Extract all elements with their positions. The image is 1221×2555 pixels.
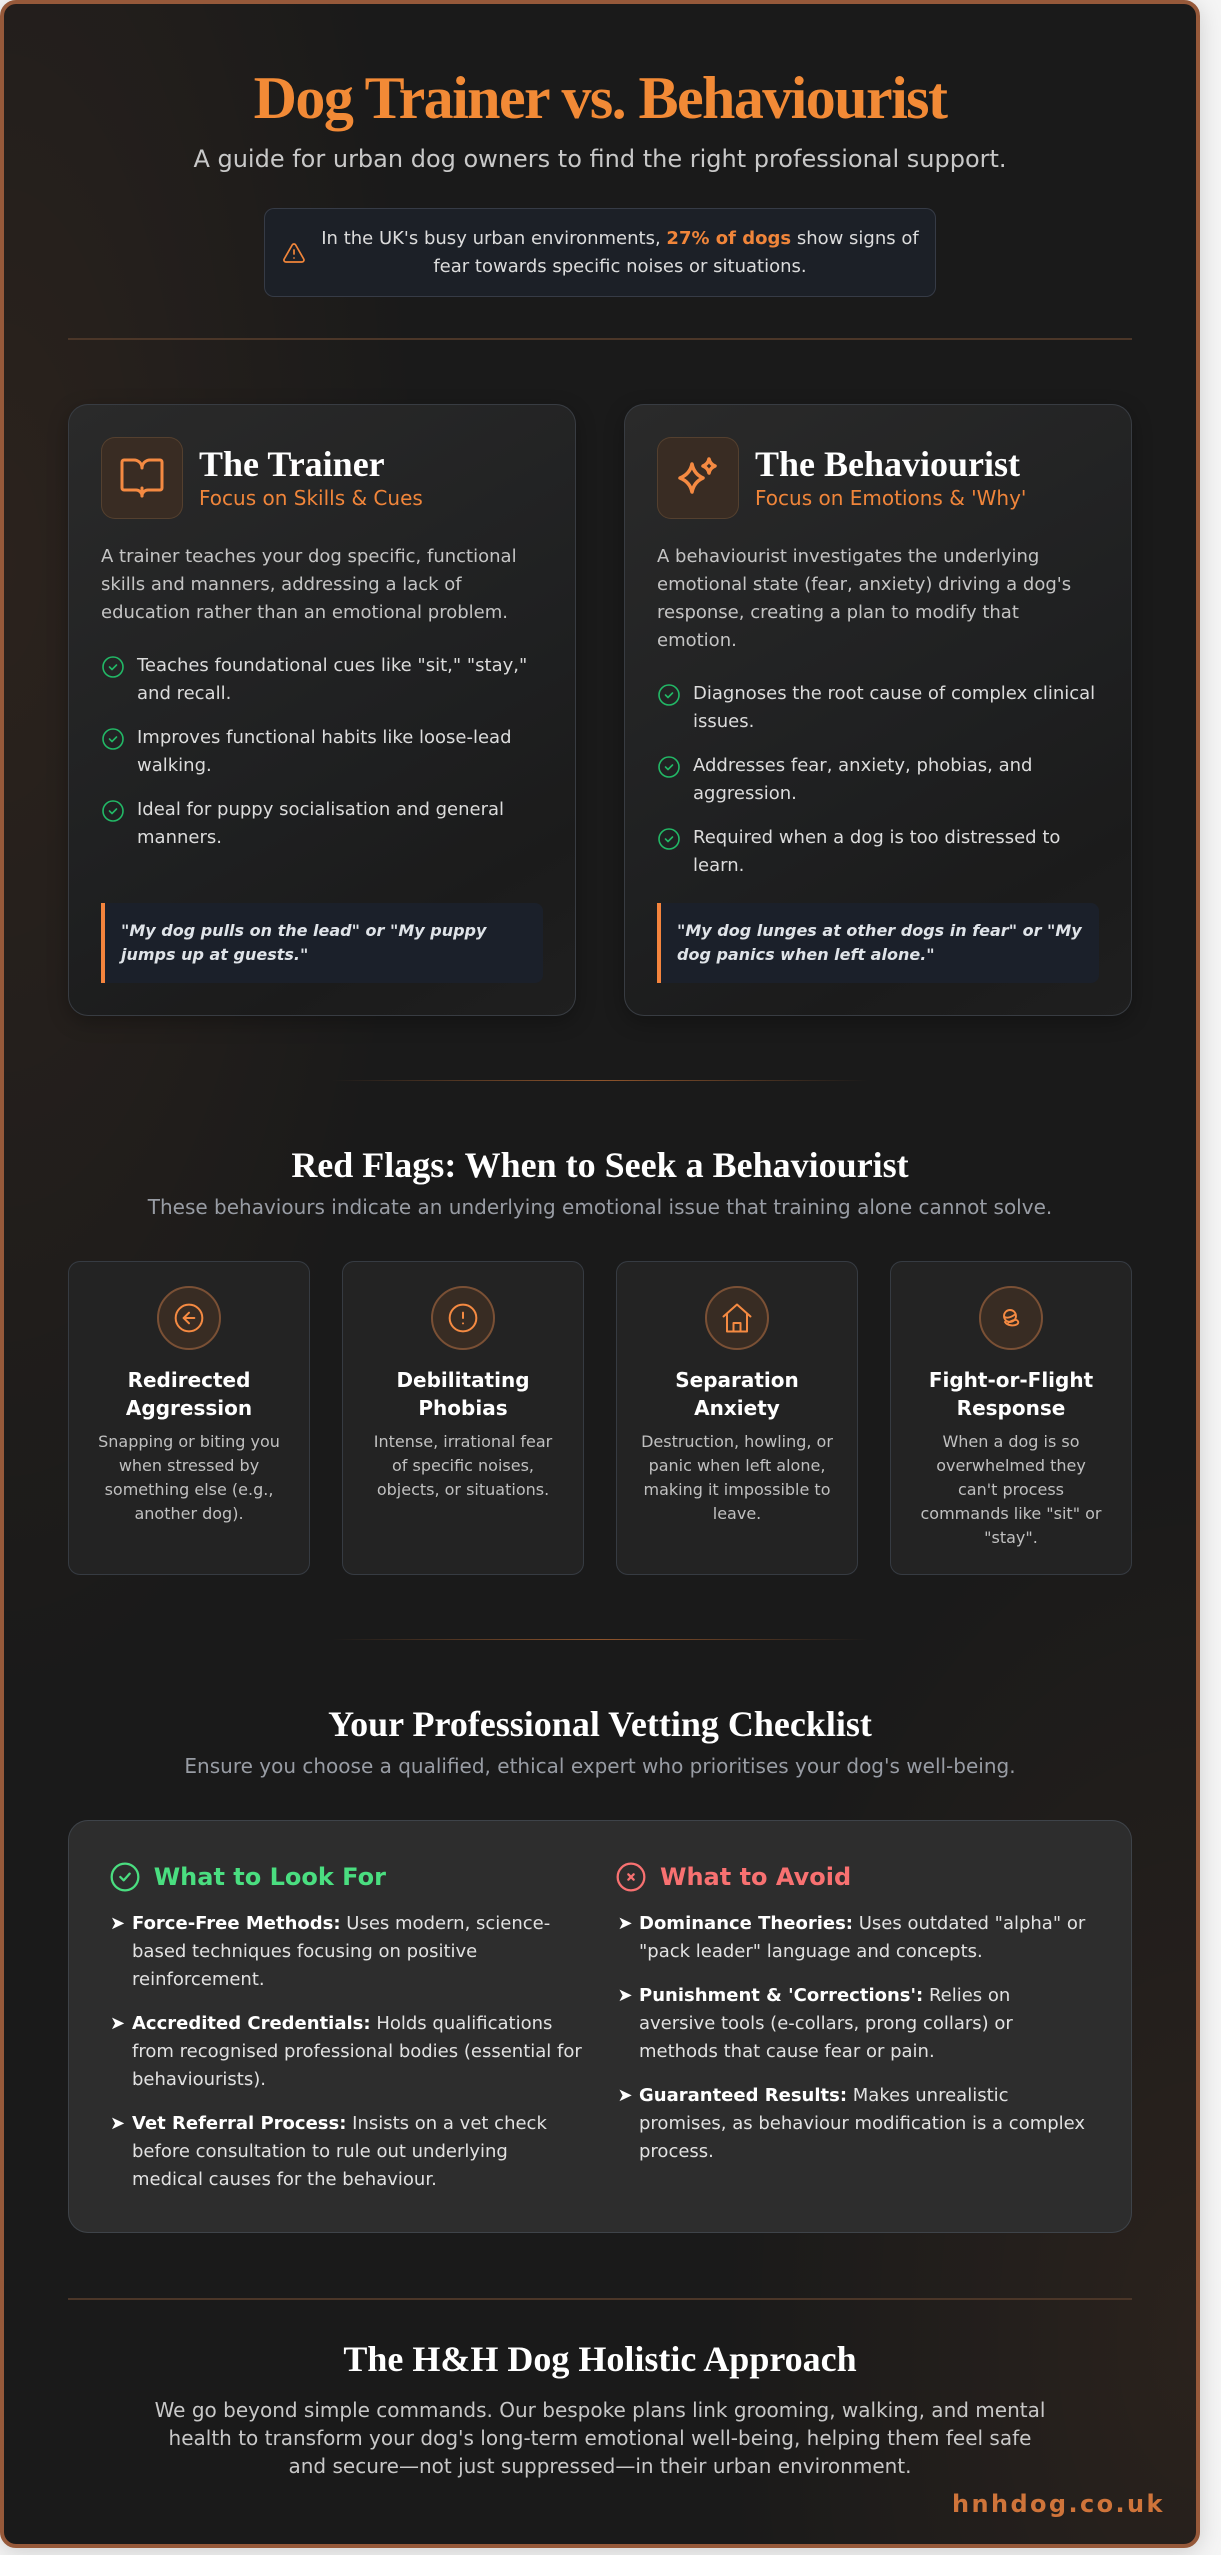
panel: checklist (68, 1820, 1132, 2233)
bullet marker: ➤ (110, 2013, 125, 2034)
flag description: of specific noises, (392, 1456, 534, 1474)
callout text: fear towards specific noises or situations. (433, 256, 807, 277)
description (101, 546, 517, 623)
red flags subtitle: These behaviours indicate an underlying emotional issue that training alone cannot solve. (148, 1195, 1052, 1219)
list item: Addresses fear, anxiety, phobias, and (693, 755, 1032, 776)
subtitle: A guide for urban dog owners to find the right professional support. (193, 144, 1007, 172)
flag title: Fight-or-Flight (929, 1368, 1093, 1392)
quote: dog panics when left alone." (677, 945, 935, 964)
icon: green check (110, 1862, 140, 1892)
quote (657, 903, 1099, 983)
flag description: Destruction, howling, or (641, 1432, 833, 1450)
flag title: Anxiety (694, 1396, 780, 1420)
list item: Ideal for puppy socialisation and general (137, 799, 504, 820)
description: skills and manners, addressing a lack of (101, 574, 462, 595)
list item: Diagnoses the root cause of complex clinical (693, 683, 1095, 704)
flag title: Redirected (128, 1368, 250, 1392)
list item (658, 755, 1032, 804)
avoid item: Dominance Theories: Uses outdated "alpha" or (639, 1913, 1085, 1934)
flag description: When a dog is so (942, 1432, 1080, 1450)
flag title (929, 1368, 1093, 1420)
look-for item: Force-Free Methods: Uses modern, science- (132, 1913, 550, 1934)
flag description: can't process (958, 1480, 1064, 1498)
panel: the trainer (68, 404, 576, 1016)
flag description: Intense, irrational fear (374, 1432, 552, 1450)
look-for item: Accredited Credentials: Holds qualifications (132, 2013, 552, 2034)
description: education rather than an emotional problem. (101, 602, 508, 623)
flag description: commands like "sit" or (920, 1504, 1102, 1522)
list item: manners. (137, 827, 222, 848)
list item: Required when a dog is too distressed to (693, 827, 1060, 848)
callout text (321, 228, 920, 277)
heading: what to avoid: What to Avoid (660, 1863, 851, 1891)
icon: open book (101, 437, 183, 519)
quote: "My dog pulls on the lead" or "My puppy (121, 921, 486, 940)
heading: the trainer: The Trainer (199, 444, 385, 484)
look-for item: based techniques focusing on positive (132, 1941, 477, 1962)
look-for item: from recognised professional bodies (essential for (132, 2041, 582, 2062)
flag description (98, 1432, 280, 1522)
panel: debilitating phobias (342, 1261, 584, 1575)
quote: jumps up at guests." (121, 945, 308, 964)
icon: scribble (979, 1286, 1043, 1350)
flag description: overwhelmed they (936, 1456, 1086, 1474)
flag title (126, 1368, 252, 1420)
avoid item (639, 2085, 1085, 2162)
panel: fight-or-flight response (890, 1261, 1132, 1575)
icon: sparkles (657, 437, 739, 519)
look-for item (132, 2113, 547, 2190)
list item: Improves functional habits like loose-lead (137, 727, 512, 748)
flag title (396, 1368, 530, 1420)
look-for item (132, 1913, 550, 1990)
panel: separation anxiety (616, 1261, 858, 1575)
avoid item: methods that cause fear or pain. (639, 2041, 935, 2062)
icon: warning triangle (283, 243, 305, 263)
list item (102, 727, 512, 776)
description: A trainer teaches your dog specific, functional (101, 546, 517, 567)
panel: the behaviourist (624, 404, 1132, 1016)
flag title: Debilitating (396, 1368, 530, 1392)
callout: statistic (264, 208, 936, 297)
heading: the behaviourist: The Behaviourist (755, 444, 1020, 484)
list item: and recall. (137, 683, 231, 704)
heading: holistic approach: The H&H Dog Holistic Approach (343, 2339, 857, 2379)
closing paragraph (155, 2398, 1045, 2478)
closing paragraph: and secure—not just suppressed—in their urban environment. (288, 2454, 912, 2478)
look-for item (132, 2013, 582, 2090)
list item (658, 683, 1095, 732)
flag description: another dog). (134, 1504, 244, 1522)
look-for item: behaviourists). (132, 2069, 266, 2090)
title: Dog Trainer vs. Behaviourist (254, 65, 946, 131)
flag description: "stay". (984, 1528, 1038, 1546)
closing paragraph: health to transform your dog's long-term emotional well-being, helping them feel safe (169, 2426, 1031, 2450)
avoid item: promises, as behaviour modification is a complex (639, 2113, 1085, 2134)
avoid item: Punishment & 'Corrections': Relies on (639, 1985, 1010, 2006)
avoid item: "pack leader" language and concepts. (639, 1941, 983, 1962)
avoid item: aversive tools (e-collars, prong collars) or (639, 2013, 1013, 2034)
list item: learn. (693, 855, 744, 876)
flag description: objects, or situations. (377, 1480, 549, 1498)
website footer: hnhdog.co.uk (952, 2490, 1165, 2518)
flag title: Separation (675, 1368, 799, 1392)
panel: redirected aggression (68, 1261, 310, 1575)
tagline: Focus on Emotions & 'Why' (755, 486, 1026, 510)
flag description (374, 1432, 552, 1498)
description: A behaviourist investigates the underlying (657, 546, 1039, 567)
flag title (675, 1368, 799, 1420)
heading: what to look for: What to Look For (154, 1863, 386, 1891)
flag description (641, 1432, 833, 1522)
description (657, 546, 1071, 651)
closing paragraph: We go beyond simple commands. Our bespoke plans link grooming, walking, and mental (155, 2398, 1045, 2422)
icon: house (705, 1286, 769, 1350)
avoid item: process. (639, 2141, 714, 2162)
flag description: panic when left alone, (649, 1456, 825, 1474)
flag description: something else (e.g., (105, 1480, 273, 1498)
look-for item: reinforcement. (132, 1969, 265, 1990)
checklist subtitle: Ensure you choose a qualified, ethical expert who prioritises your dog's well-being. (184, 1754, 1016, 1778)
description: emotional state (fear, anxiety) driving a dog's (657, 574, 1071, 595)
heading: red flags: Red Flags: When to Seek a Behaviourist (291, 1144, 909, 1184)
list item (102, 799, 504, 848)
flag description: Snapping or biting you (98, 1432, 280, 1450)
flag title: Aggression (126, 1396, 252, 1420)
flag description (920, 1432, 1102, 1546)
description: response, creating a plan to modify that (657, 602, 1019, 623)
look-for item: Vet Referral Process: Insists on a vet check (132, 2113, 547, 2134)
list item: aggression. (693, 783, 797, 804)
bullet marker: ➤ (110, 2113, 125, 2134)
list item: issues. (693, 711, 754, 732)
flag description: leave. (713, 1504, 761, 1522)
description: emotion. (657, 630, 737, 651)
icon: arrow in circle (157, 1286, 221, 1350)
flag description: when stressed by (119, 1456, 259, 1474)
avoid item (639, 1985, 1013, 2062)
tagline: Focus on Skills & Cues (199, 486, 423, 510)
flag title: Phobias (418, 1396, 508, 1420)
list item: Teaches foundational cues like "sit," "stay," (137, 655, 527, 676)
flag description: making it impossible to (644, 1480, 830, 1498)
look-for item: medical causes for the behaviour. (132, 2169, 437, 2190)
bullet marker: ➤ (110, 1913, 125, 1934)
avoid item (639, 1913, 1086, 1962)
quote: "My dog lunges at other dogs in fear" or "My (677, 921, 1082, 940)
bullet marker: ➤ (618, 1913, 633, 1934)
list item (102, 655, 527, 704)
look-for item: before consultation to rule out underlying (132, 2141, 508, 2162)
flag title: Response (957, 1396, 1065, 1420)
callout text: In the UK's busy urban environments, 27% of dogs show signs of (321, 228, 919, 249)
icon: alert circle (431, 1286, 495, 1350)
avoid item: Guaranteed Results: Makes unrealistic (639, 2085, 1009, 2106)
heading: vetting checklist: Your Professional Vetting Checklist (328, 1704, 872, 1744)
bullet marker: ➤ (618, 1985, 633, 2006)
list item: walking. (137, 755, 212, 776)
quote (101, 903, 543, 983)
icon: red cross (616, 1862, 646, 1892)
list item (658, 827, 1060, 876)
bullet marker: ➤ (618, 2085, 633, 2106)
